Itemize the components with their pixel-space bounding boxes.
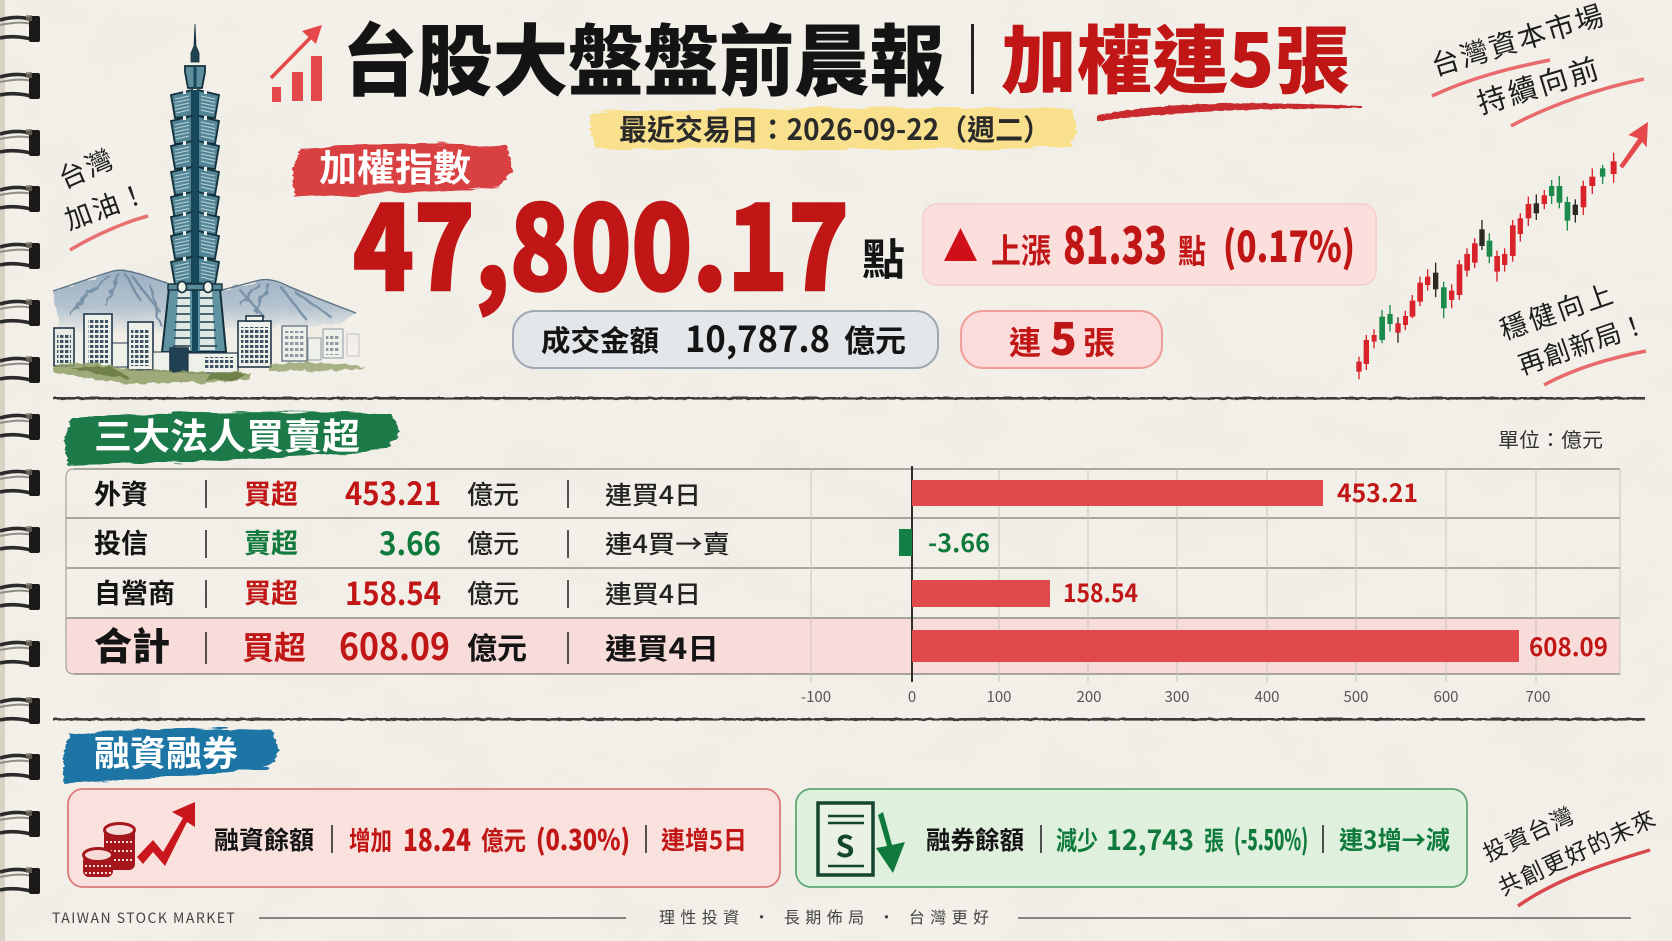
bars: -3.66 xyxy=(928,524,990,560)
row: investment trust: 賣超 xyxy=(244,522,298,561)
row: dealers: 158.54 xyxy=(345,569,441,615)
handwritten note: Taiwan cheer: 台灣 xyxy=(51,137,120,196)
panel: margin balance: 連增5日 xyxy=(661,821,747,857)
row: foreign investors xyxy=(94,469,701,515)
city buildings xyxy=(54,314,359,373)
divider xyxy=(53,397,1645,400)
icon: document and falling arrow xyxy=(818,803,905,875)
handwritten note: steady rise: 再創新局！ xyxy=(1513,304,1652,383)
row: total: 買超 xyxy=(242,623,306,669)
handwritten note: invest in Taiwan: 投資台灣 xyxy=(1477,796,1580,868)
axis labels: -100 xyxy=(801,686,831,707)
row: foreign investors: 453.21 xyxy=(345,469,441,515)
row: dealers: 億元 xyxy=(467,574,519,611)
change box: (0.17%) xyxy=(1223,214,1355,275)
bars: 453.21 xyxy=(1337,474,1418,510)
panel: margin balance: (0.30%) xyxy=(536,819,630,859)
row: foreign investors: 外資 xyxy=(94,473,148,512)
row: foreign investors: 億元 xyxy=(467,475,519,512)
handwritten note: capital market: 持續向前 xyxy=(1471,45,1606,123)
axis labels: 700 xyxy=(1526,686,1550,707)
axis labels: 400 xyxy=(1255,686,1279,707)
bars: 608.09 xyxy=(1529,628,1608,664)
handwritten note: Taiwan cheer xyxy=(51,137,153,250)
row: total: 608.09 xyxy=(339,617,450,671)
title: 台股大盤盤前晨報 xyxy=(342,0,945,112)
panel: short balance: 減少 xyxy=(1056,821,1098,858)
axis labels: 500 xyxy=(1344,686,1368,707)
change box: 點 xyxy=(1178,225,1206,273)
streak pill: 張 xyxy=(1083,318,1115,364)
panel: margin balance: 融資餘額 xyxy=(214,821,314,857)
divider xyxy=(53,718,1645,721)
panel: margin balance xyxy=(68,789,780,887)
streak pill xyxy=(961,304,1162,368)
unit note: 單位：億元 xyxy=(1498,424,1603,453)
row: total: 合計 xyxy=(94,616,170,671)
panel: margin balance: 18.24 xyxy=(403,816,471,860)
streak pill: 5 xyxy=(1050,304,1077,368)
turnover pill xyxy=(513,311,938,368)
row: foreign investors: 買超 xyxy=(244,473,298,512)
turnover pill: 10,787.8 xyxy=(685,311,830,363)
streak pill: 連 xyxy=(1009,318,1041,364)
row: dealers: 連買4日 xyxy=(605,575,701,611)
heading: institutional investors xyxy=(64,408,400,466)
bars xyxy=(899,474,1608,664)
row: investment trust: 投信 xyxy=(94,522,148,561)
axis labels: 100 xyxy=(987,686,1011,707)
title xyxy=(342,0,1362,120)
axis labels: 600 xyxy=(1434,686,1458,707)
row: dealers: 自營商 xyxy=(94,572,175,611)
badge: weighted index: 加權指數 xyxy=(319,138,471,192)
axis labels: 200 xyxy=(1077,686,1101,707)
panel: short balance xyxy=(796,789,1467,887)
panel: margin balance: 億元 xyxy=(481,821,526,858)
panel: short balance: (-5.50%) xyxy=(1234,819,1308,859)
index value: 47,800.17 xyxy=(353,156,849,324)
title: 加權連5張 xyxy=(1001,2,1350,109)
row: dealers xyxy=(94,569,701,615)
handwritten note: capital market xyxy=(1426,0,1644,126)
illustration: Taipei 101 skyline xyxy=(53,24,366,383)
change box: 上漲 xyxy=(991,224,1051,273)
footer xyxy=(52,904,1631,928)
axis labels: 300 xyxy=(1165,686,1189,707)
date banner: 最近交易日：2026-09-22（週二） xyxy=(619,107,1051,149)
footer: 理性投資 • 長期佈局 • 台灣更好 xyxy=(659,904,989,928)
row: dealers: 買超 xyxy=(244,572,298,611)
panel: short balance: 融券餘額 xyxy=(926,821,1024,857)
row: investment trust xyxy=(94,519,730,565)
handwritten note: steady rise: 穩健向上 xyxy=(1494,272,1620,348)
icon: document and falling arrow: S xyxy=(836,822,854,866)
row: total: 億元 xyxy=(467,624,527,668)
turnover pill: 億元 xyxy=(844,316,906,361)
arrow: upward trend xyxy=(1619,122,1648,168)
row: investment trust: 億元 xyxy=(467,524,519,561)
footer: TAIWAN STOCK MARKET xyxy=(52,908,236,928)
row: foreign investors: 連買4日 xyxy=(605,476,701,512)
table frame xyxy=(66,466,1620,682)
turnover pill: 成交金額 xyxy=(541,318,659,360)
panel: short balance: 張 xyxy=(1204,821,1224,858)
panel: margin balance: 增加 xyxy=(349,821,392,858)
row: investment trust: 連4買→賣 xyxy=(605,525,730,561)
index value: 點 xyxy=(862,226,905,288)
change box: 81.33 xyxy=(1063,205,1167,279)
heading: margin trading: 融資融券 xyxy=(94,726,238,777)
spiral binding xyxy=(0,15,40,894)
row: total: 連買4日 xyxy=(605,626,719,668)
candlestick chart xyxy=(1356,122,1648,379)
heading: institutional investors: 三大法人買賣超 xyxy=(94,408,360,460)
panel: short balance: 連3增→減 xyxy=(1339,821,1450,857)
axis labels xyxy=(801,686,1550,707)
mountains xyxy=(53,270,356,332)
change box xyxy=(923,204,1376,285)
icon: coins and rising arrow xyxy=(83,802,195,877)
greenery xyxy=(53,362,366,383)
table and bar chart: institutional flows xyxy=(66,466,1620,707)
handwritten note: steady rise xyxy=(1494,272,1652,385)
panel: short balance: 12,743 xyxy=(1106,819,1194,859)
axis labels: 0 xyxy=(908,686,916,707)
handwritten note: Taiwan cheer: 加油！ xyxy=(58,171,153,238)
handwritten note: invest in Taiwan: 共創更好的未來 xyxy=(1492,799,1661,902)
heading: margin trading xyxy=(63,726,279,784)
bars: 158.54 xyxy=(1063,574,1138,610)
icon: rising chart xyxy=(271,25,322,102)
row: total xyxy=(94,616,719,671)
row: investment trust: 3.66 xyxy=(379,519,441,565)
tower xyxy=(162,24,226,352)
badge: weighted index xyxy=(293,138,512,198)
